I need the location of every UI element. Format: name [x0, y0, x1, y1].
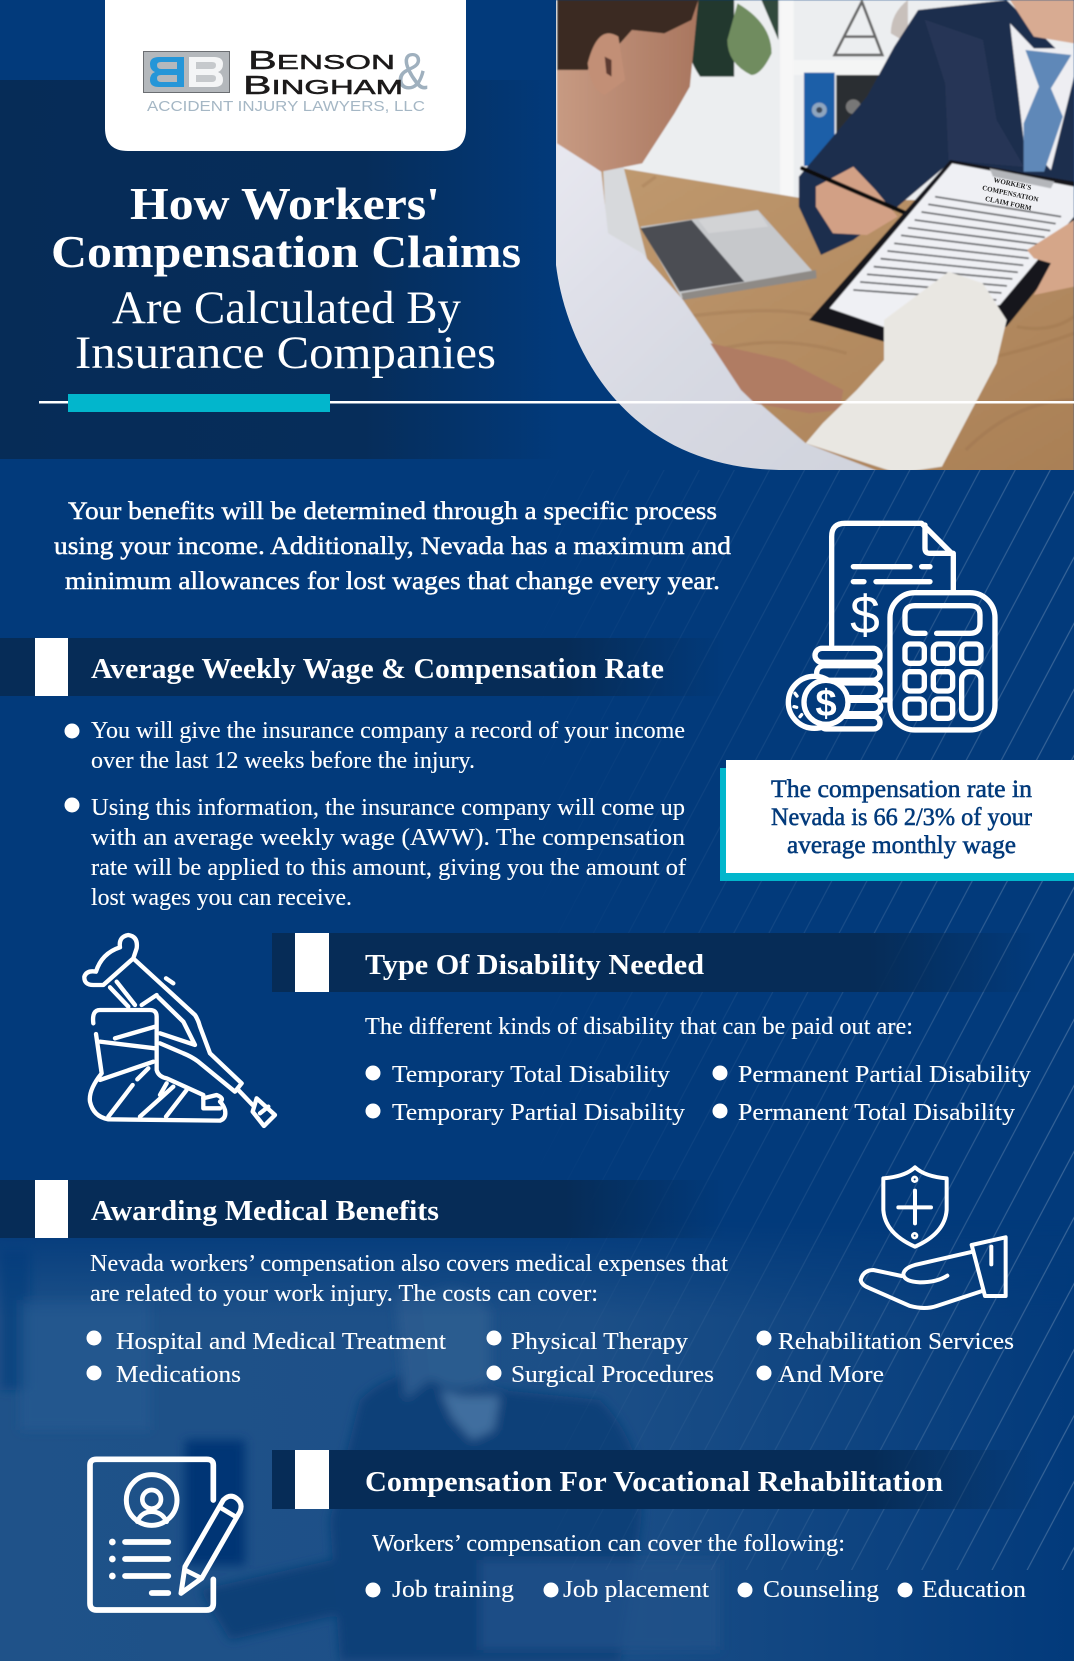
logo card [105, 0, 466, 151]
header panel [0, 0, 560, 459]
bullet one: over the last 12 weeks before the injury. [91, 747, 475, 774]
medical benefits list: And More [778, 1361, 884, 1388]
intro text: Your benefits will be determined through a specific process [68, 498, 717, 525]
callout: compensation rate [720, 760, 1074, 881]
icon: shield over open hand [861, 1167, 1006, 1308]
bullet one: You will give the insurance company a record of your income [91, 717, 685, 744]
paragraph [90, 1250, 728, 1307]
vocational list: Education [922, 1576, 1026, 1603]
logo wordmark: B ENSON [248, 45, 395, 75]
bullet two [64, 794, 687, 911]
bullet two: Using this information, the insurance company will come up [91, 794, 685, 821]
header photo: claim form being signed [540, 0, 1074, 480]
vocational list [366, 1576, 1026, 1603]
heading bar [272, 933, 1037, 992]
section: vocational rehabilitation [272, 1450, 1042, 1603]
disability list: Permanent Total Disability [738, 1099, 1016, 1126]
medical benefits list: Medications [116, 1361, 241, 1388]
intro text [54, 498, 732, 595]
form title on clipboard [982, 178, 1039, 210]
medical benefits list: Surgical Procedures [511, 1361, 714, 1388]
heading bar [0, 638, 725, 696]
heading bar: Compensation For Vocational Rehabilitation [365, 1466, 943, 1498]
logo mark [144, 52, 230, 92]
vocational list: Job placement [563, 1576, 709, 1603]
paragraph: are related to your work injury. The costs can cover: [90, 1280, 598, 1307]
heading bar: Average Weekly Wage & Compensation Rate [91, 653, 664, 685]
medical benefits list: Hospital and Medical Treatment [116, 1328, 446, 1355]
form title on clipboard: CLAIM FORM [984, 195, 1033, 213]
bullet two: rate will be applied to this amount, giving you the amount of [91, 854, 687, 881]
icon: profile document and pencil [90, 1459, 241, 1610]
icon: receipt, calculator and coins [788, 523, 995, 730]
paragraph: Nevada workers’ compensation also covers medical expenses that [90, 1250, 728, 1277]
section: awarding medical benefits [0, 1180, 1014, 1388]
title: Compensation Claims [51, 226, 521, 277]
form title on clipboard: COMPENSATION [981, 184, 1039, 204]
disability list [366, 1061, 1032, 1126]
logo tagline: ACCIDENT INJURY LAWYERS, LLC [147, 98, 425, 115]
intro text: minimum allowances for lost wages that change every year. [65, 568, 720, 595]
medical benefits list [86, 1328, 1014, 1388]
bullet two: with an average weekly wage (AWW). The compensation [91, 824, 685, 851]
medical benefits list: Physical Therapy [511, 1328, 689, 1355]
intro text: using your income. Additionally, Nevada has a maximum and [54, 533, 732, 560]
logo ampersand: & [397, 43, 428, 101]
disability list: Temporary Partial Disability [392, 1099, 686, 1126]
form title on clipboard: WORKER'S [993, 176, 1032, 192]
logo wordmark second line: B INGHAM [243, 70, 403, 100]
title [51, 178, 521, 379]
callout: compensation rate: average monthly wage [787, 832, 1016, 859]
section: average weekly wage [0, 638, 725, 911]
vocational list: Job training [392, 1576, 514, 1603]
medical benefits list: Rehabilitation Services [778, 1328, 1014, 1355]
background photo: distressed man, faded [0, 1250, 925, 1661]
intro line: Workers’ compensation can cover the following: [372, 1530, 845, 1557]
heading bar: Awarding Medical Benefits [91, 1195, 439, 1227]
diagonal line pattern [650, 470, 1074, 1570]
callout: compensation rate: Nevada is 66 2/3% of your [771, 804, 1033, 831]
disability list: Temporary Total Disability [392, 1061, 671, 1088]
icon: crutch and leg cast [84, 935, 275, 1126]
bullet two: lost wages you can receive. [91, 884, 352, 911]
header divider rule and accent [39, 394, 1074, 412]
heading bar: Type Of Disability Needed [365, 949, 704, 981]
heading bar [0, 1180, 725, 1238]
intro line: The different kinds of disability that can be paid out are: [365, 1013, 913, 1040]
callout: compensation rate: The compensation rate in [771, 776, 1033, 803]
bullet one [64, 717, 685, 774]
section: type of disability [272, 933, 1037, 1126]
icon: receipt, calculator and coins: $ [850, 586, 880, 645]
icon: receipt, calculator and coins: $ [815, 682, 837, 725]
title: Insurance Companies [75, 327, 496, 379]
title: Are Calculated By [112, 282, 461, 334]
heading bar [272, 1450, 1042, 1509]
disability list: Permanent Partial Disability [738, 1061, 1032, 1088]
vocational list: Counseling [763, 1576, 879, 1603]
title: How Workers' [130, 178, 440, 229]
